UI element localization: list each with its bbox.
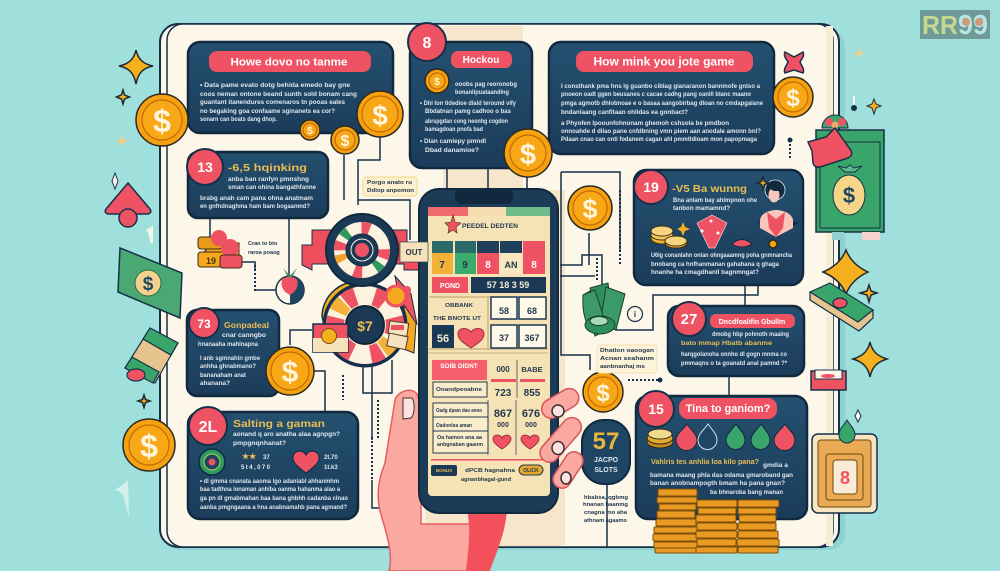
screen footer — [431, 459, 546, 483]
text block: hnanaaha mahlnapna — [198, 342, 259, 348]
coin — [136, 94, 188, 146]
icon: cash stack right — [810, 283, 873, 331]
smartphone — [419, 188, 558, 513]
top roulette wheel — [326, 214, 398, 286]
coin: $ — [596, 380, 610, 407]
stat left: 37 — [263, 455, 270, 461]
text block — [651, 253, 793, 276]
icon: heart — [293, 451, 319, 473]
text block: I consthank pma hns lg guanbo ciblag gianaranon bannmofe gnlso a — [561, 84, 761, 90]
text block: • Data pame evato dotg behida emedo bay gne — [200, 83, 351, 89]
text block: cnar canngbo — [222, 333, 266, 339]
text block: gmdia a — [763, 463, 789, 469]
text block: pnoeon oadt ggen beusanes c cacae cadhg pang oanill blanc maano — [561, 92, 751, 98]
text block: tanbon mamamnd? — [673, 206, 730, 212]
jackpot caption: cnagna mo aha — [584, 510, 628, 516]
icon: fruit token — [276, 268, 304, 304]
lower wheel — [322, 276, 417, 365]
panel: step 2L — [188, 407, 358, 519]
icon: cash bundle — [583, 283, 625, 336]
section: stats: THE BNOTE UT — [433, 316, 482, 322]
icon: money bill with bag: $ — [843, 183, 855, 208]
notch — [455, 188, 513, 204]
grid row: 8 — [485, 260, 491, 271]
section: results: 000 — [496, 365, 510, 374]
text block: harqgolanoha onnho dl gogn mnma co — [681, 352, 787, 358]
panel: step 19 — [634, 170, 803, 285]
icon: gold star bottom right — [853, 342, 887, 377]
open book — [160, 24, 845, 550]
callout: aanbnanhaj ms — [600, 364, 645, 370]
heading pill: How mink you jote game — [594, 56, 734, 68]
screen footer: BONUS — [436, 468, 452, 473]
heading: Salting a gaman — [233, 419, 325, 430]
coin: $ — [582, 194, 598, 224]
thumb nail — [403, 398, 414, 419]
text block: aanba pmgngaana a hna anabnamahb pana agmand? — [200, 505, 347, 511]
section: results: SOIB DIDNT — [440, 363, 478, 370]
icon: small badge — [628, 306, 642, 322]
card on lower wheel — [313, 324, 348, 352]
hand behind phone — [378, 390, 507, 571]
coin — [568, 186, 612, 230]
grid row: AN — [504, 260, 518, 270]
section: results: 000 — [525, 422, 537, 429]
text block: bamana maang phla das odama gmaroband gan — [650, 473, 793, 479]
token red — [386, 286, 411, 306]
section: stats: 58 — [499, 306, 509, 316]
jackpot caption: hbabsa, qgbmg — [584, 495, 628, 501]
icons: droplets — [676, 424, 795, 450]
panel: step 13 — [187, 149, 328, 218]
heading: -V5 Ba wunng — [672, 184, 747, 195]
coin — [583, 372, 623, 412]
coin: $ — [140, 428, 158, 464]
jackpot caption — [583, 495, 628, 524]
panel: step 15 — [636, 391, 807, 519]
text block: Dbad danamioe? — [425, 148, 479, 154]
text block: • dl gmma cnanata aaoma lgo adanlabl ahhanmhm — [200, 479, 339, 485]
coin: $ — [372, 100, 388, 131]
text block: I anb sgmnahin gmbe — [200, 356, 261, 362]
callout: Dhatlon oaoogan — [600, 348, 655, 354]
step number 13 — [187, 149, 223, 185]
text block: U6lg conanlahn onlan ohngaaamng poha gnmnancha — [651, 253, 793, 259]
heading pill: Howe dovo no tanme — [230, 56, 348, 68]
section: results: 855 — [524, 388, 541, 399]
text block: anba ban ranfyn pmnshng — [228, 177, 309, 183]
section: results: 867 — [494, 408, 512, 420]
app title: PEEDEL DEDTEN — [462, 223, 518, 230]
jackpot caption: hnanan haanmg — [583, 502, 628, 508]
text block — [650, 463, 793, 496]
icon: small badge: i — [634, 310, 636, 319]
screen footer: agnanbhagal-gund — [461, 477, 511, 483]
small coin — [331, 126, 359, 154]
text block — [233, 432, 340, 447]
text block: aonand q aro anatha alaa agnpgn? — [233, 432, 340, 438]
stat left: ★★ — [242, 452, 257, 461]
callout: Porgo anato ru — [367, 180, 412, 186]
icon: dollar bill left — [118, 248, 182, 318]
grid row: 9 — [462, 260, 468, 271]
section: results: 000 — [497, 422, 509, 429]
pod row: 57 18 3 59 — [487, 280, 529, 290]
coin — [357, 91, 403, 137]
panel: how does — [188, 42, 393, 133]
step number 8: 8 — [423, 35, 432, 52]
text block: ga pn dl gmabmahan baa bana ghbhh cadanba clnao — [200, 496, 348, 502]
section: results: Ooandpeoabne — [436, 387, 482, 393]
panel: hookup — [408, 23, 532, 168]
icon: gold and red bag — [198, 230, 242, 268]
icon: red star on bill — [808, 128, 852, 167]
pod row — [432, 277, 546, 293]
icon: small star left — [138, 395, 150, 408]
text block — [673, 198, 758, 212]
section: results — [428, 353, 548, 455]
pod row: POND — [440, 283, 460, 290]
grid row: 8 — [531, 260, 537, 271]
icon: faint arrow — [115, 480, 129, 518]
text block — [420, 82, 517, 154]
icons: small sparkles right — [851, 48, 881, 114]
icon: cash bundle left — [125, 328, 178, 383]
callout: Acnan seahanm — [600, 356, 654, 362]
panel: step 27 — [668, 302, 804, 376]
section: stats: 367 — [524, 333, 540, 343]
icon: framed tile: 8 — [840, 468, 850, 488]
app title — [445, 215, 518, 233]
screen top strip — [428, 207, 550, 216]
section: results: Oa hamon ana aa — [437, 435, 483, 441]
text block: coos neman ontone beand sunth sold bonam cang — [200, 92, 357, 98]
step number 2L: 2L — [199, 419, 218, 436]
screen footer: OLICK — [523, 468, 539, 474]
text block: pmpgnqnhanat? — [233, 441, 286, 447]
icon: star — [757, 177, 769, 190]
stat left: 5t4,070 — [241, 465, 271, 471]
text block — [200, 83, 357, 123]
coin — [123, 419, 175, 471]
logo watermark — [920, 9, 990, 40]
icon: red star top — [784, 52, 804, 73]
label tag: OUT — [406, 248, 423, 257]
small coin — [300, 120, 320, 140]
label tag — [400, 242, 428, 262]
text block: sonarn can boats dang dhop. — [200, 117, 277, 123]
wheel value: $7 — [357, 318, 373, 334]
small coin: $ — [341, 133, 350, 150]
text block: pmmaqns o ta goanatd anal pamnd ?* — [681, 361, 788, 367]
text block: Pdaan cnao can onti fodanem cagan ahl pmmtldioam mon papopmaga — [561, 137, 758, 143]
section: stats: 37 — [499, 333, 509, 343]
section: results: 676 — [522, 408, 540, 420]
step number 73: 73 — [197, 317, 211, 331]
small coin: $ — [307, 126, 313, 137]
jackpot badge: SLOTS — [594, 467, 618, 474]
icon: small coin — [769, 240, 777, 248]
step number 19: 19 — [643, 179, 659, 195]
small caption: Cran to bto — [248, 241, 278, 247]
coin — [504, 129, 552, 177]
text block — [681, 332, 789, 367]
text block: sman can ohina bangathfanne — [228, 185, 317, 191]
icons: sparkles left — [112, 50, 153, 189]
jackpot badge — [582, 420, 630, 484]
fingers — [536, 385, 586, 492]
ribbon — [302, 230, 420, 270]
section: results: 723 — [495, 388, 512, 399]
heading: Gonpadeal — [224, 320, 269, 330]
heading pill: Tina to ganiom? — [686, 403, 771, 415]
text block: bnobang ca hnfhanmanan gahahana q ghaga — [651, 262, 780, 268]
section: stats — [429, 297, 548, 349]
icon: gold and red bag: 19 — [206, 256, 216, 266]
coin — [266, 347, 314, 395]
section: results: Oadg dpam dao anoo — [436, 408, 483, 414]
icon: green chip — [199, 449, 225, 475]
stat left — [241, 452, 271, 471]
text block: Bna anlam bay ahlmpnon ohe — [673, 198, 758, 204]
heading pill — [679, 398, 777, 419]
icon: coins — [651, 226, 687, 248]
text block: bananaham anat — [200, 373, 246, 379]
grid row — [432, 241, 545, 274]
text block: • Dhl ton tidedioe dlald teround vify — [420, 101, 517, 107]
step number 27: 27 — [681, 311, 697, 328]
text block: brabg anah cam pana ohna anatmam — [200, 196, 313, 202]
text block: en gnfndnaghma ham bam bogaanmd? — [200, 204, 310, 210]
small caption: raroa poaog — [248, 250, 280, 256]
icon: red gem — [697, 215, 727, 248]
coin: $ — [282, 356, 299, 389]
coin: $ — [153, 103, 171, 139]
subheading: Vahlris tes anhlia loa kilo pana? — [651, 459, 759, 466]
text block: a Phyofen lpoounfohnonam ghemoh cshsola be pmdbon — [561, 121, 729, 127]
text block — [200, 177, 317, 210]
text block: no begaking goa confaame sginanets ea cor? — [200, 109, 335, 115]
heading pill — [576, 51, 753, 72]
callout — [363, 177, 417, 196]
text block: anhha ghnabmano? — [200, 364, 256, 370]
step number 8 — [408, 23, 446, 61]
icon: sparkle — [677, 222, 690, 236]
callout — [597, 345, 657, 373]
heading pill — [451, 51, 512, 68]
text block: guantant itanendures comenaros tn pooas eales — [200, 100, 346, 106]
text block: • Dlan camlepy pmndl — [420, 139, 486, 145]
jackpot badge: JACPO — [594, 457, 619, 464]
stat right — [324, 455, 338, 471]
step number 2L — [189, 407, 227, 445]
text block: bamagdoan pnofa bad — [425, 127, 483, 133]
screen — [428, 207, 550, 496]
icon: lips — [732, 240, 752, 247]
stat right: 1t.k3 — [324, 465, 338, 471]
section: results: anbgnaban gaanm — [437, 442, 483, 448]
step number 15: 15 — [648, 401, 664, 417]
text block: hnanhe ha cmagdhanll bagnmngat? — [651, 270, 759, 276]
icon: small coin — [425, 69, 449, 93]
text block: ooobs pag reoronobg — [455, 82, 517, 88]
icon: red box — [811, 370, 846, 390]
text block: ahanana? — [200, 381, 230, 387]
icon: small coin: $ — [434, 77, 440, 88]
logo watermark: 99 — [958, 9, 988, 40]
text block: pmga agmotb dhlobnoae e o basaa aangobirbag dloan no cmdapgalane — [561, 101, 764, 107]
icon: dollar bill left: $ — [143, 274, 154, 295]
icon: framed tile — [812, 410, 877, 513]
icon: gold diamond star — [823, 250, 868, 294]
icon: coin stack — [647, 429, 673, 448]
heading: -6,5 hqinking — [228, 163, 307, 174]
text block: baa tadthna lonaman anhlba oanma hahanma alao a — [200, 487, 341, 493]
text block: bato mmap Hbatb abanme — [681, 340, 772, 347]
heading pill — [209, 51, 371, 72]
coin: $ — [786, 85, 800, 112]
section: stats: 68 — [527, 306, 537, 316]
text block: dmobg hbp pohnoth maalng — [712, 332, 789, 338]
section: results: Oadonloa aman — [436, 423, 473, 429]
connector lines — [210, 137, 792, 547]
text block: bndanlaang canfitaan ohlidas ea gonbact? — [561, 110, 688, 116]
icon: small star — [860, 285, 877, 302]
text block: ba bhnaroba bang manan — [710, 490, 783, 496]
section: stats: 56 — [437, 333, 449, 345]
gold bar stacks — [653, 489, 779, 553]
coin: $ — [520, 139, 536, 171]
step number 19 — [634, 170, 668, 204]
section: results: BABE — [521, 365, 543, 374]
heading pill: Dncdfoalifin Gbullm — [719, 319, 785, 326]
screen footer: dPCB hagnahna — [465, 468, 516, 474]
text block: Bbdatnan pamg cadhoo o bas — [425, 109, 512, 115]
text block: abrspgdan cong neonhg cogdon — [425, 119, 508, 125]
panel: how think — [549, 42, 774, 154]
logo watermark: RR — [922, 10, 958, 40]
step number 13: 13 — [197, 159, 213, 175]
coin — [773, 77, 813, 117]
small caption — [248, 241, 280, 256]
small tickets — [387, 321, 409, 350]
panel: step 73 — [187, 308, 279, 396]
section: stats: OBBANK — [445, 303, 473, 309]
jackpot badge: 57 — [593, 428, 619, 455]
step number 15 — [638, 391, 674, 427]
text block — [561, 84, 764, 143]
jackpot caption: athnam agaamo — [584, 518, 628, 524]
text block — [198, 333, 266, 387]
grid row: 7 — [439, 260, 445, 271]
text block: banan anobnampogth bmam ha pana gnan? — [650, 481, 785, 487]
text block: bonanlipuataanding — [455, 90, 509, 96]
icon: money bill with bag — [816, 115, 884, 240]
heading pill: Hockou — [463, 55, 499, 66]
callout: Ddiop anpomon — [367, 188, 415, 194]
icon: red triangle token — [105, 183, 153, 243]
text block: onnoahde d dilao pane cnfdbning vmn piem aan anodale amonn bni? — [561, 129, 761, 135]
icon: woman — [758, 180, 799, 238]
stat right: 2t.70 — [324, 455, 338, 461]
text block — [200, 479, 348, 511]
